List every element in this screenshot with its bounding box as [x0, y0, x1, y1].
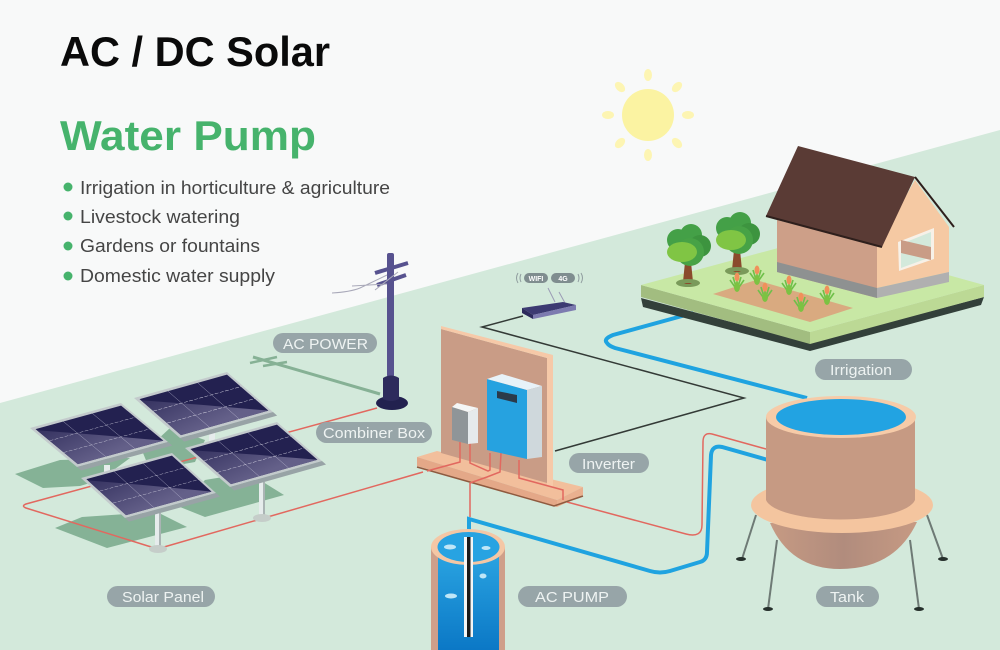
- label: Irrigation: Irrigation: [830, 362, 892, 379]
- pipe: well to tank: [469, 447, 768, 572]
- water tank: [736, 396, 948, 611]
- subtitle: Water Pump: [60, 112, 316, 159]
- bullet list: [64, 178, 390, 286]
- bullet list: Irrigation in horticulture & agriculture: [80, 178, 390, 198]
- icon: sun: [602, 69, 694, 161]
- label: Solar Panel: [107, 586, 215, 607]
- irrigation platform: [641, 238, 984, 351]
- solar panel left: [30, 403, 172, 475]
- wire: inverter to well: [469, 483, 471, 517]
- icon: utility pole shadow: [250, 357, 380, 394]
- wire: inverter to pump and tank: [567, 434, 766, 535]
- label: Tank: [816, 586, 879, 607]
- wire: combiner box to solar panels: [24, 408, 423, 548]
- solar panel back: [134, 372, 277, 442]
- wall panel: [417, 326, 583, 507]
- wifi and 4G badges: 4G: [558, 276, 568, 283]
- panel shadows: [15, 428, 284, 548]
- label: Inverter: Inverter: [582, 456, 635, 473]
- bullet list: Gardens or fountains: [80, 236, 260, 256]
- wifi and 4G badges: WIFI: [529, 276, 543, 283]
- bullet list: Domestic water supply: [80, 266, 275, 286]
- inverter: [487, 374, 542, 459]
- crops: [730, 266, 834, 312]
- internal wiring: [427, 442, 563, 500]
- bullet list: Livestock watering: [80, 207, 240, 227]
- label: Combiner Box: Combiner Box: [323, 425, 426, 442]
- icon: AC power pole: [332, 253, 408, 410]
- label: AC PUMP: AC PUMP: [535, 589, 609, 606]
- pipe: tank to irrigation: [606, 313, 807, 398]
- wifi router: [522, 288, 576, 319]
- label: AC POWER: [273, 333, 377, 353]
- label: Irrigation: [815, 359, 912, 380]
- data cable: [482, 316, 744, 451]
- trees: [667, 212, 760, 287]
- label: Tank: Tank: [830, 589, 865, 606]
- solar panel right: [185, 422, 326, 522]
- label: Combiner Box: [316, 422, 432, 443]
- title: AC / DC Solar: [60, 28, 330, 75]
- label: AC POWER: AC POWER: [283, 336, 368, 353]
- house: [766, 146, 954, 298]
- combiner box: [452, 403, 478, 444]
- label: Inverter: [569, 453, 649, 473]
- label: AC PUMP: [518, 586, 627, 607]
- label: Solar Panel: Solar Panel: [122, 589, 204, 606]
- well with AC pump: [431, 529, 505, 650]
- ground: [0, 130, 1000, 650]
- solar panel front: [81, 453, 220, 553]
- wifi and 4G badges: [516, 273, 582, 283]
